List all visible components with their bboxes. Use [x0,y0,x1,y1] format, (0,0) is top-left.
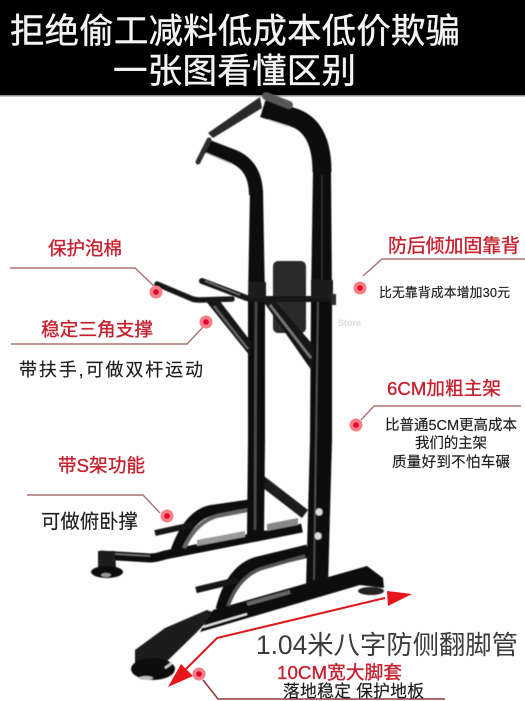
rear base tube [91,518,302,578]
front S-frame with push-up handle [196,551,308,610]
rear diagonal brace [257,477,305,514]
callout: 6CM main frame [350,378,521,471]
front top curved tube [263,108,322,172]
callout: protective foam: 保护泡棉 [48,238,122,259]
text: main frame note [385,417,517,471]
text: push-up note: 可做俯卧撑 [41,511,138,533]
triangle brace left [205,300,252,356]
back pad [273,261,306,333]
headline line 2: 一张图看懂区别 [113,53,356,91]
callout: S-frame [27,455,174,522]
dip bar right [202,281,333,299]
text: base width label: 1.04米八字防侧翻脚管 [256,630,518,660]
text: backrest cost note: 比无靠背成本增加30元 [379,285,510,300]
dip bar left [157,284,232,300]
triangle brace right [263,301,314,371]
post collars and clamp [249,280,336,305]
text: main frame note: 我们的主架 [415,435,487,452]
callout: protective foam [10,238,162,298]
headline line 1: 拒绝偷工减料低成本低价欺骗 [10,13,460,51]
pull-up bar [208,97,262,138]
text: main frame note: 质量好到不怕车碾 [392,454,510,471]
callout: wide foot cover [192,662,445,701]
callout: triangle support [11,316,212,344]
text: main frame note: 比普通5CM更高成本 [385,417,517,434]
right upright post [306,170,332,587]
callout: reinforced backrest: 防后倾加固靠背 [388,235,520,257]
left upright post [247,190,265,535]
callout: wide foot cover: 10CM宽大脚套 [277,662,402,683]
text: armrest note: 带扶手,可做双杆运动 [19,360,203,380]
callout: S-frame: 带S架功能 [58,455,145,476]
header banner [0,0,525,96]
rear S-frame with push-up handle [155,505,250,551]
front base tube [131,566,384,680]
product: power tower frame [91,96,384,680]
watermark: Store [338,318,361,328]
arrow: base width dimension [168,591,412,687]
text: foot cover note: 落地稳定 保护地板 [283,682,424,701]
callout: triangle support: 稳定三角支撑 [41,319,153,340]
rear top curved tube [206,146,256,195]
callout: reinforced backrest [354,235,525,300]
callout: 6CM main frame: 6CM加粗主架 [387,378,501,399]
post bolts [314,508,323,540]
